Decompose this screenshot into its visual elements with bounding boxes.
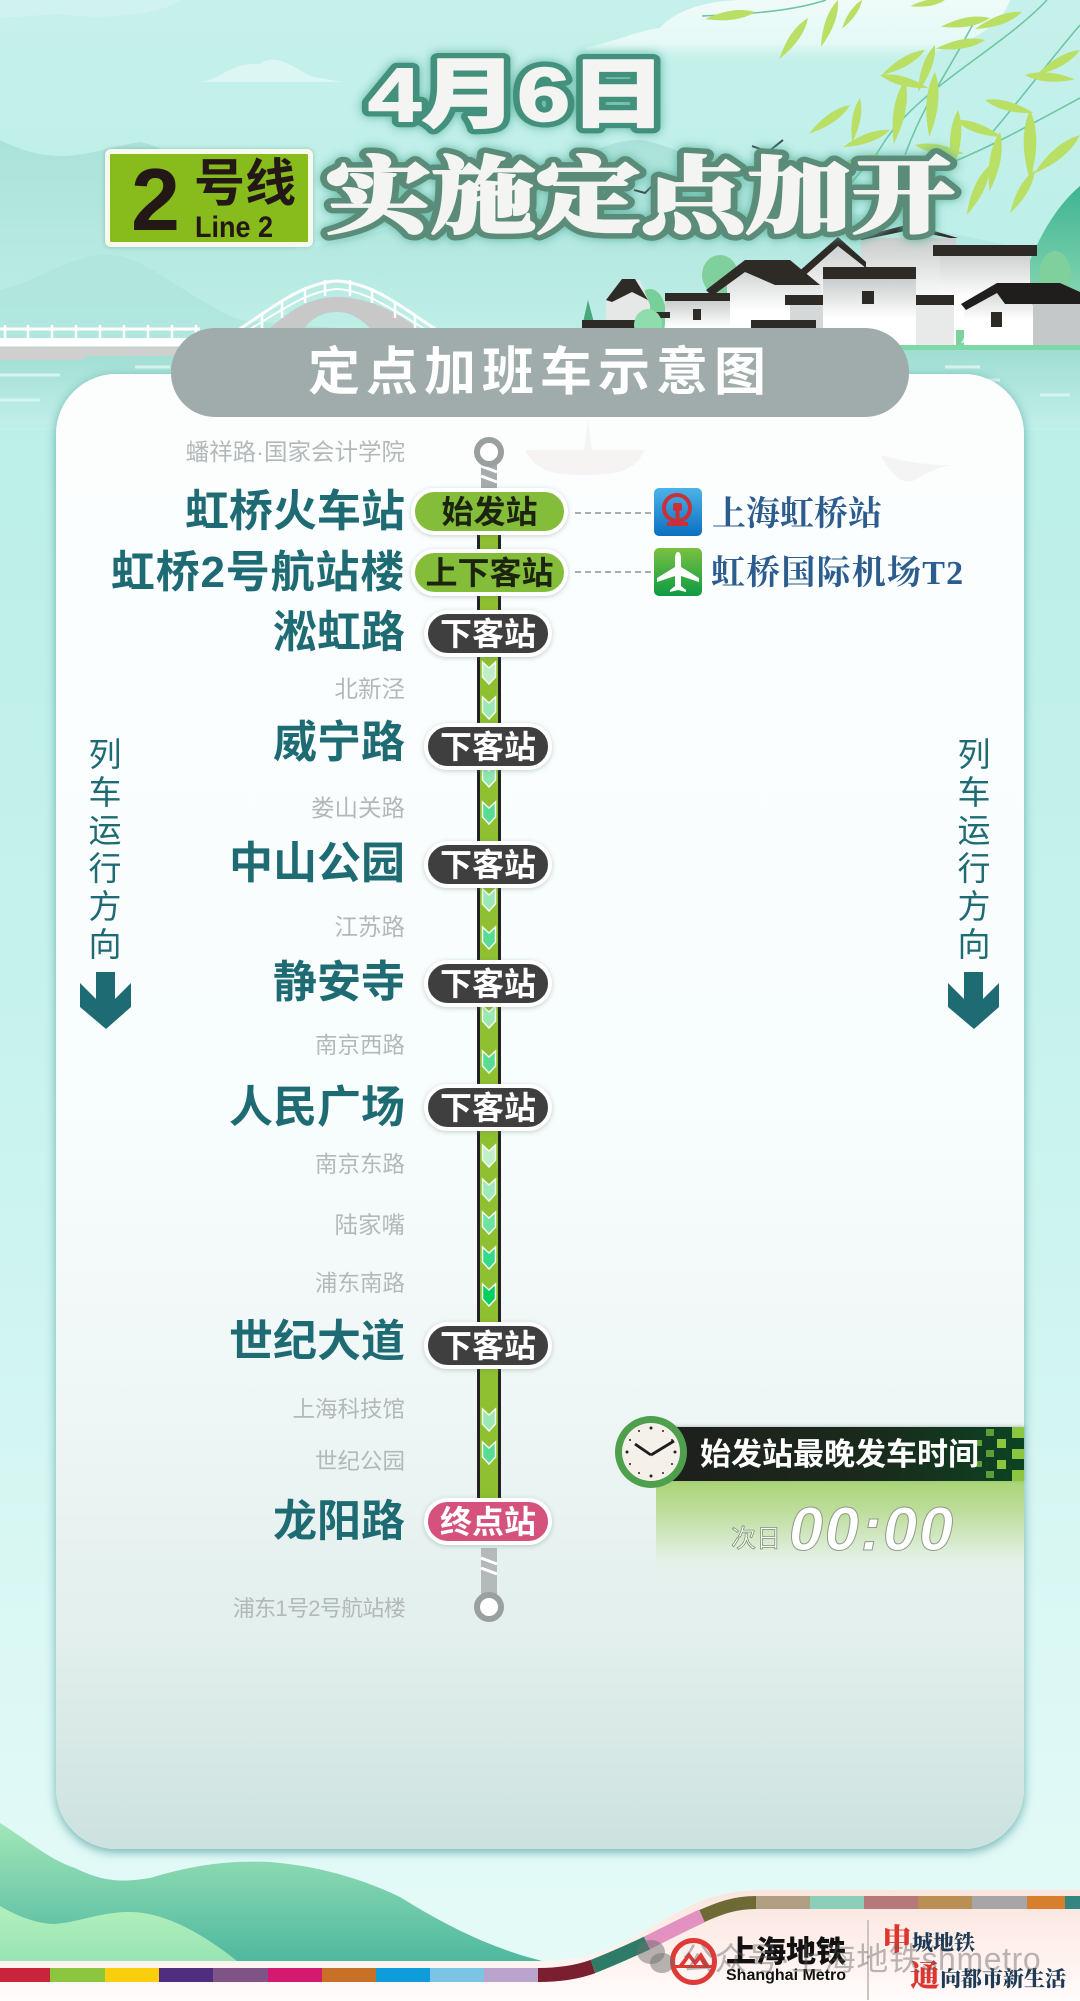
wordmark English: Shanghai Metro [726,1967,846,1984]
panel: last departure time [615,1416,1026,1563]
watermark [637,1940,1041,1977]
willow branches [702,0,1080,217]
direction label right: 方 [958,888,990,925]
direction label right: 向 [958,926,990,963]
pill: 始发站 [411,488,568,535]
pill: 人民广场 下客站: 下客站 [440,1090,536,1126]
pill: 淞虹路 下客站: 下客站 [440,616,536,652]
pill: 上下客站 [411,549,568,596]
pill: 世纪大道 下客站: 下客站 [440,1328,536,1364]
slogan [882,1924,1066,1993]
station: 世纪大道: 世纪大道 [229,1317,405,1366]
direction label left: 车 [88,774,122,811]
icon: wechat [637,1940,674,1973]
intermediate station: 上海科技馆: 上海科技馆 [292,1397,405,1422]
pill: 人民广场 下客站 [424,1084,552,1131]
bottom hills [0,1823,542,1961]
direction label left: 向 [88,926,122,963]
pill: 威宁路 下客站: 下客站 [440,729,536,765]
houses [578,224,1080,350]
station: 人民广场: 人民广场 [229,1083,405,1132]
bridge [0,280,440,360]
badge: line 2: 2 [131,150,180,249]
slogan line 2: 通向都市新生活 [910,1960,1066,1993]
icon: railway [654,488,702,536]
clouds [0,0,1010,82]
end terminal [477,1548,501,1619]
title: date and headline: 实施定点加开 [326,151,956,245]
stop type pills [408,486,570,1548]
direction chevrons [482,662,496,1464]
title: date and headline [314,46,967,247]
arrow left [80,972,131,1029]
pill: 终点站: 终点站 [440,1504,536,1540]
direction label left: 行 [88,850,122,887]
direction label right: 列 [958,736,990,773]
bottom pink band [0,1890,1080,2001]
pill: 终点站 [424,1498,552,1545]
pill: 世纪大道 下客站 [424,1322,552,1369]
mountains [0,140,1080,360]
icon: airport [654,548,702,596]
pill: 上下客站: 上下客站 [425,555,554,591]
intermediate station: 蟠祥路: 蟠祥路·国家会计学院 [186,439,405,465]
intermediate station: 南京东路: 南京东路 [315,1152,405,1177]
label: 上海虹桥站: 上海虹桥站 [712,496,882,533]
pill: 威宁路 下客站 [424,723,552,770]
intermediate station: 陆家嘴: 陆家嘴 [334,1212,405,1238]
pill: 静安寺 下客站: 下客站 [440,966,536,1002]
direction label right [958,736,990,963]
direction label left: 列 [88,736,122,773]
label: 虹桥国际机场T2: 虹桥国际机场T2 [711,555,964,592]
start terminal [477,440,501,490]
direction label right: 运 [958,812,990,849]
station: 威宁路: 威宁路 [273,718,405,767]
direction label left [88,736,122,963]
direction label left: 方 [88,888,122,925]
time background [656,1481,1024,1591]
panel: route diagram card [56,374,1024,1849]
watermark text: 公众号·上海地铁shmetro [682,1941,1041,1977]
metro line colour strip [0,1896,1080,1982]
dashed connectors to interchange [575,512,651,573]
badge: line 2: Line 2 [195,211,273,244]
intermediate station: 娄山关路: 娄山关路 [311,795,405,821]
badge: line 2 [105,149,313,247]
pixel check pattern [976,1427,1024,1481]
pill: 淞虹路 下客站 [424,610,552,657]
intermediate station: 北新泾: 北新泾 [334,676,405,702]
intermediate station: 浦东1号2号航站楼: 浦东1号2号航站楼 [233,1596,405,1621]
station: 中山公园: 中山公园 [229,839,405,888]
arrow right [948,972,999,1029]
text: 次日: 次日 [731,1525,781,1553]
icon: metro roundel [670,1938,717,1985]
title: date and headline: 实施定点加开 [326,151,956,245]
badge: line 2: 号线 [194,155,296,212]
intermediate station: 世纪公园: 世纪公园 [315,1449,405,1474]
birds [634,140,783,193]
intermediate station: 南京西路: 南京西路 [315,1033,405,1058]
heading pill [171,328,909,417]
direction label right: 车 [958,774,990,811]
pill: 中山公园 下客站: 下客站 [440,847,536,883]
station: 虹桥2号航站楼: 虹桥2号航站楼 [111,548,405,597]
heading: 始发站最晚发车时间: 始发站最晚发车时间 [700,1437,979,1472]
logo: Shanghai Metro [670,1936,846,1985]
station: 龙阳路: 龙阳路 [273,1497,405,1546]
intermediate station: 浦东南路: 浦东南路 [315,1271,405,1296]
direction label left: 运 [88,812,122,849]
title: date and headline: 4月6日 [368,53,666,138]
intermediate station: 江苏路: 江苏路 [334,914,405,940]
station: 静安寺: 静安寺 [273,958,405,1007]
wordmark Chinese: 上海地铁 [726,1936,846,1969]
route line [474,437,504,1622]
water [0,345,1080,430]
slogan line 1: 申城地铁 [882,1924,975,1957]
pill: 始发站: 始发站 [441,494,538,530]
time: 00:00: 00:00 [789,1495,955,1563]
green track [478,530,500,1525]
faint boat and swallow decoration [526,423,948,482]
icon: clock [615,1416,687,1488]
station: 虹桥火车站: 虹桥火车站 [185,487,405,536]
divider [867,1920,868,2000]
pill: 静安寺 下客站 [424,960,552,1007]
heading pill: 定点加班车示意图 [308,344,772,402]
station: 淞虹路: 淞虹路 [273,608,405,657]
pill: 中山公园 下客站 [424,841,552,888]
title: date and headline: 4月6日 [368,53,666,138]
dark title bar [650,1427,1024,1481]
direction label right: 行 [958,850,990,887]
